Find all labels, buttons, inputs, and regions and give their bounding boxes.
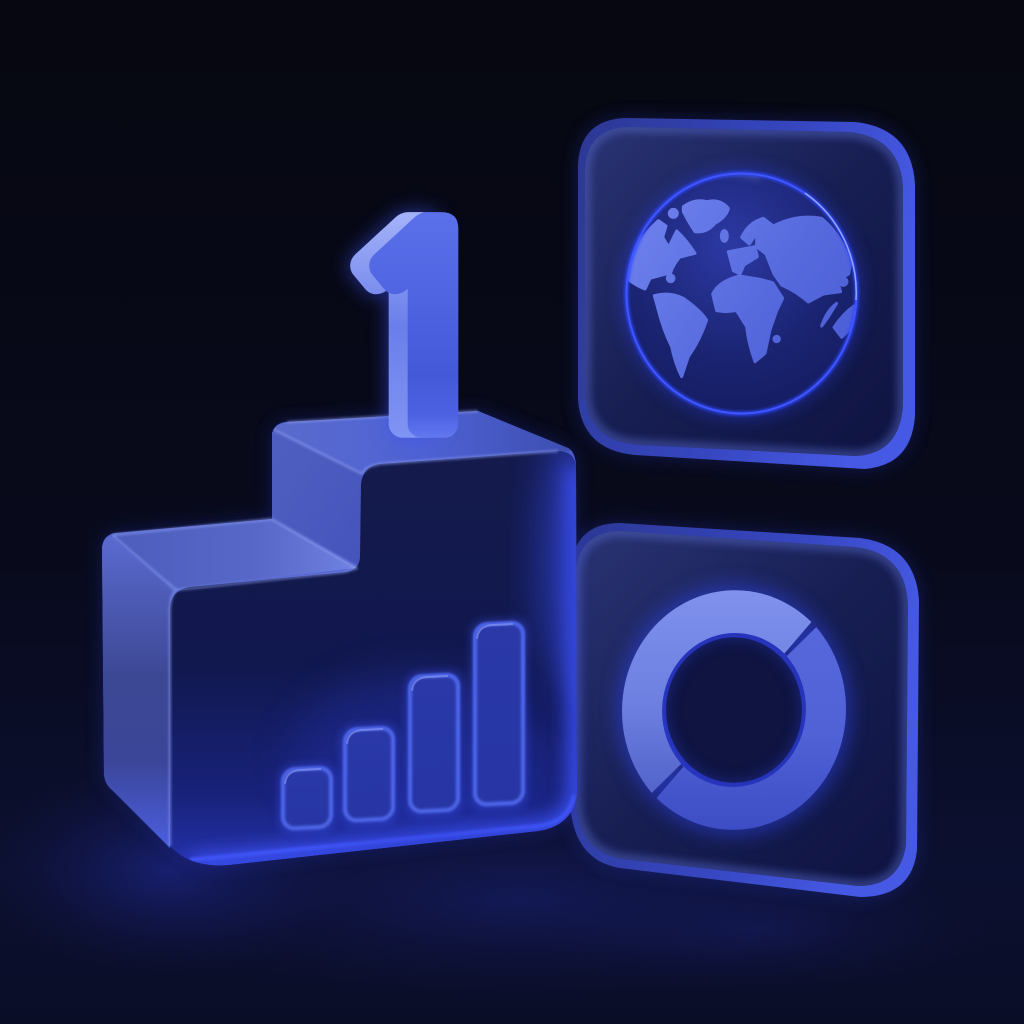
podium left face (102, 536, 175, 848)
number one: 1 (327, 201, 489, 466)
bar 3 (405, 669, 463, 818)
donut segment: right (670, 642, 826, 808)
bar 4 (470, 617, 528, 811)
podium front face (170, 451, 577, 865)
highlights on edges (112, 451, 558, 846)
chart: donut ring (640, 609, 828, 811)
bar 1 (278, 762, 336, 835)
podium upper step top (274, 411, 571, 474)
podium step riser (272, 432, 362, 566)
donut segment: left (642, 612, 798, 778)
podium: glass stepped block (102, 411, 611, 866)
podium lower step top (112, 519, 357, 592)
panel: donut card (570, 523, 919, 897)
icon: globe (624, 169, 860, 416)
bar chart: rising bars (278, 617, 528, 835)
number one: 1 (327, 201, 489, 466)
panel: globe card (578, 118, 915, 469)
number one: 1 (346, 201, 508, 466)
bar 2 (340, 722, 398, 827)
